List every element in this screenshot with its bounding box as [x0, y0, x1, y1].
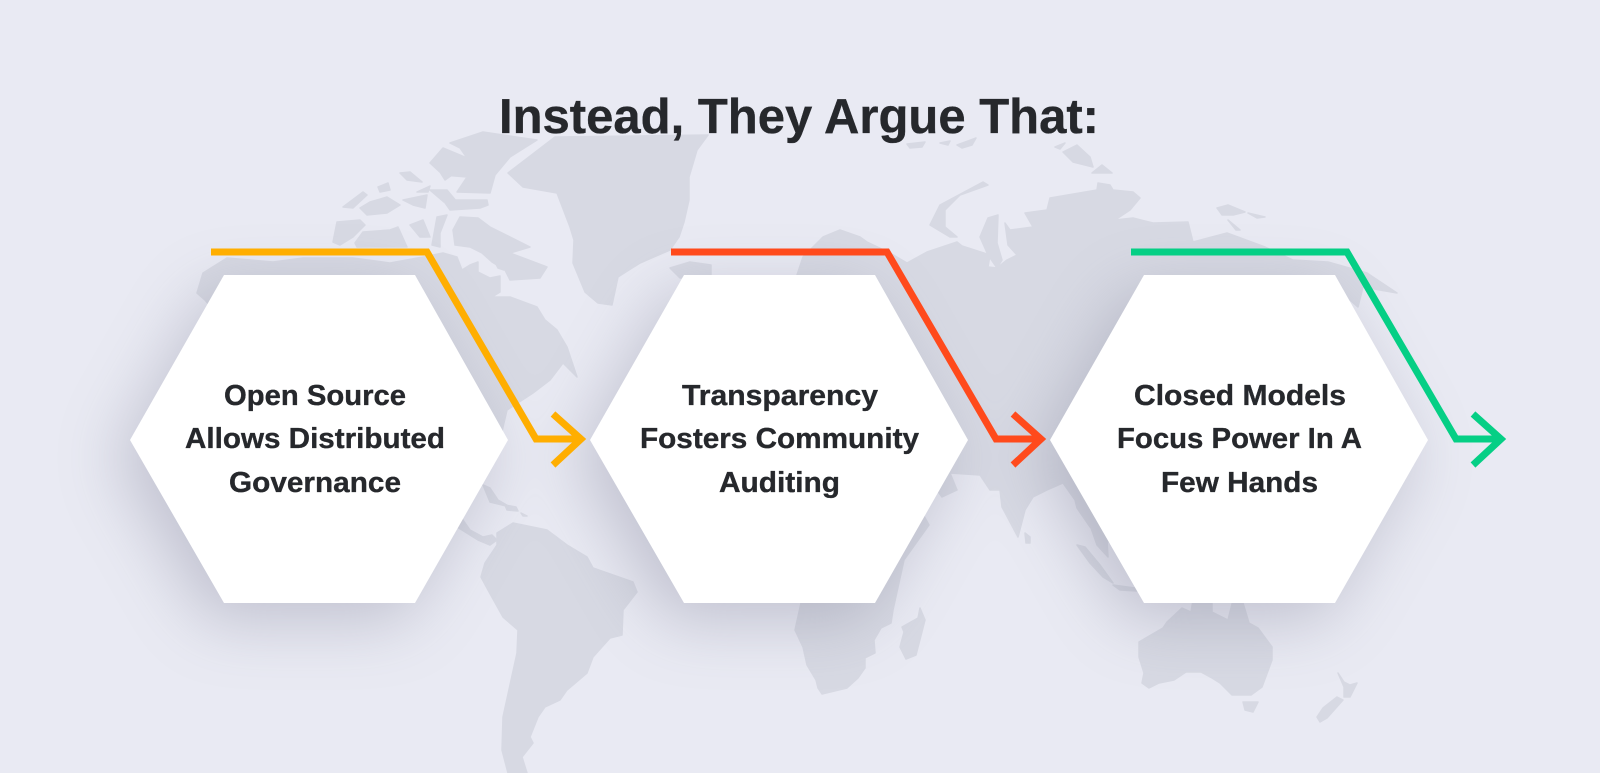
- island: tasmania: [1243, 702, 1258, 712]
- text: open source allows distributed governance: [185, 380, 445, 499]
- islands: canadian arctic: [333, 132, 537, 247]
- island: sri lanka: [1025, 533, 1030, 543]
- text: transparency fosters community auditing: Auditing: [719, 467, 840, 499]
- hexagon 2: [590, 275, 968, 603]
- panel: closed models: [1050, 275, 1428, 603]
- peninsula: yamal: [980, 215, 1002, 268]
- text: open source allows distributed governance: Governance: [229, 467, 401, 499]
- text: transparency fosters community auditing: Transparency: [682, 380, 878, 412]
- hexagon shadows: [116, 293, 1414, 621]
- text: transparency fosters community auditing: [640, 380, 919, 499]
- islands: new zealand: [1317, 673, 1357, 722]
- island: baffin: [453, 217, 547, 280]
- island: iceland: [670, 262, 711, 278]
- text: transparency fosters community auditing: Fosters Community: [640, 423, 919, 455]
- arrow: red: [671, 252, 1041, 465]
- islands: arctic russia: [907, 138, 1265, 230]
- island: madagascar: [900, 608, 925, 659]
- text: open source allows distributed governance: Open Source: [224, 380, 406, 412]
- islands: southeast asia: [1077, 525, 1137, 591]
- text: closed models focus power in a few hands: [1117, 380, 1362, 499]
- island: novaya zemlya: [930, 182, 988, 237]
- hexagon 1: [130, 275, 508, 603]
- hexagon 3: [1050, 275, 1428, 603]
- continent: africa: [680, 320, 929, 694]
- region: central america and caribbean: [440, 485, 527, 545]
- text: closed models focus power in a few hands: Focus Power In A: [1117, 423, 1362, 455]
- continent: greenland: [508, 135, 708, 305]
- text: closed models focus power in a few hands: Few Hands: [1161, 467, 1318, 499]
- panel: transparency: [590, 275, 968, 603]
- arrow: orange: [211, 252, 581, 465]
- islands: hudson area: [462, 258, 504, 300]
- text: closed models focus power in a few hands: Closed Models: [1134, 380, 1346, 412]
- title: Instead, They Argue That:: [499, 90, 1099, 144]
- panel: open source: [130, 275, 508, 603]
- continent: australia: [1139, 600, 1272, 695]
- world map background: [197, 132, 1397, 773]
- continent: eurasia: [797, 183, 1397, 560]
- arrow: green: [1131, 252, 1501, 465]
- continent: south america: [481, 523, 637, 773]
- continent: north america: [197, 253, 577, 470]
- text: open source allows distributed governance: Allows Distributed: [185, 423, 445, 455]
